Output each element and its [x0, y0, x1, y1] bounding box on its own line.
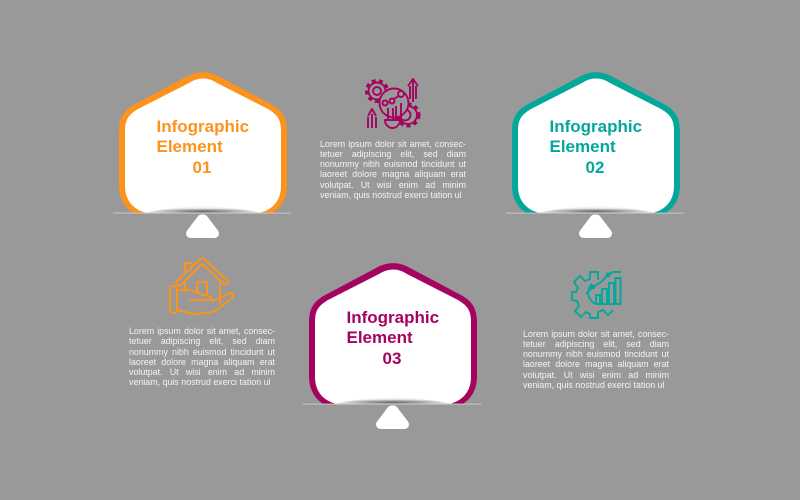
heading: element 01: Element [156, 137, 223, 156]
text block: lower left: veniam, quis nostrud exerci tation ul [129, 377, 271, 387]
text block: lower right: volutpat. Ut wisi enim ad minim [523, 370, 669, 380]
heading: element 02 [550, 117, 642, 177]
heading: element 01: Infographic [156, 117, 249, 136]
text block: top centre: volutpat. Ut wisi enim ad minim [320, 180, 466, 190]
text block: lower left: nonummy nibh euismod tincidunt ut [129, 347, 275, 357]
heading: element 03: 03 [382, 349, 401, 368]
icon: hand holding house [170, 258, 233, 314]
card 02 shape [506, 72, 684, 234]
heading: element 03: Infographic [346, 308, 439, 327]
card 03 shape [303, 263, 481, 424]
card 01 shape [113, 72, 291, 234]
heading: element 03: Element [346, 328, 413, 347]
text block: lower left: Lorem ipsum dolor sit amet, consec- [129, 326, 275, 336]
heading: element 02: Infographic [550, 117, 642, 136]
text block: lower right: tetuer adipiscing elit, sed diam [523, 339, 669, 349]
text block: top centre: veniam, quis nostrud exerci tation ul [320, 190, 462, 200]
heading: element 02: 02 [586, 158, 604, 177]
heading: element 02: Element [550, 137, 616, 156]
text block: top centre: laoreet dolore magna aliquam erat [320, 169, 466, 179]
icon: gear with bar chart [572, 272, 621, 318]
text block: lower right: laoreet dolore magna aliquam erat [523, 359, 669, 369]
heading: element 03 [346, 308, 439, 368]
text block: top centre: tetuer adipiscing elit, sed diam [320, 149, 466, 159]
text block: lower right: Lorem ipsum dolor sit amet, consec- [523, 328, 669, 338]
text block: lower left: volutpat. Ut wisi enim ad minim [129, 367, 275, 377]
icon: gears and chart with arrows [366, 79, 419, 128]
text block: lower left: laoreet dolore magna aliquam erat [129, 357, 275, 367]
text block: lower left [129, 326, 275, 387]
text block: lower right: veniam, quis nostrud exerci tation ul [523, 380, 665, 390]
text block: top centre: nonummy nibh euismod tincidunt ut [320, 159, 466, 169]
text block: top centre [320, 138, 466, 200]
text block: top centre: Lorem ipsum dolor sit amet, consec- [320, 138, 466, 148]
text block: lower right: nonummy nibh euismod tincidunt ut [523, 349, 669, 359]
heading: element 01: 01 [192, 158, 211, 177]
heading: element 01 [156, 117, 249, 177]
text block: lower right [523, 328, 669, 390]
text block: lower left: tetuer adipiscing elit, sed diam [129, 336, 275, 346]
